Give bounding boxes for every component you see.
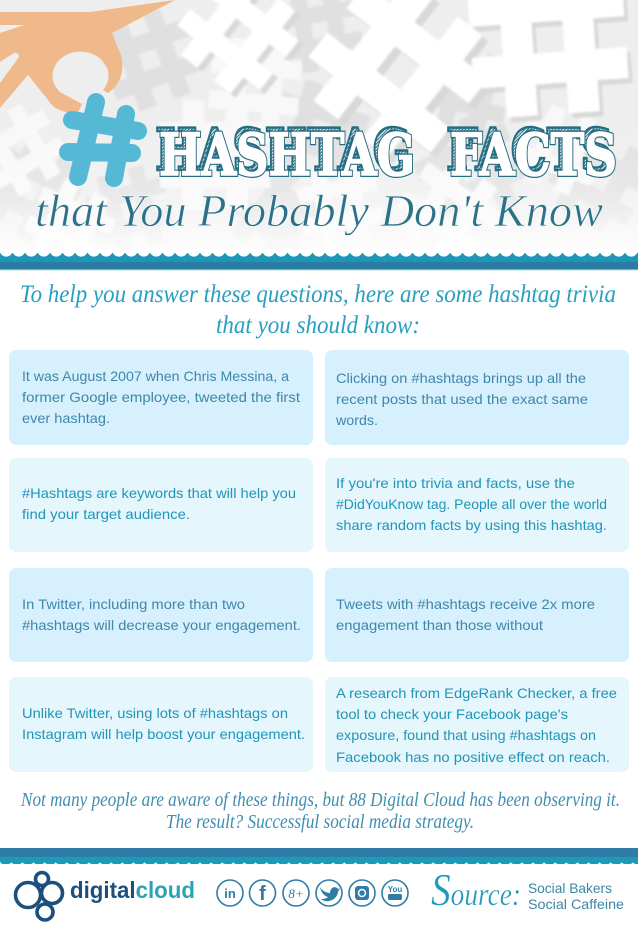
icon: blue hashtag <box>68 102 138 178</box>
card 7 <box>9 677 313 772</box>
closing text <box>20 789 620 833</box>
card 5: In Twitter, including more than two <box>22 596 245 612</box>
card 1: former Google employee, tweeted the first <box>22 389 300 405</box>
subtitle: that You Probably Don't Know <box>35 185 603 236</box>
card 4: If you're into trivia and facts, use the <box>336 475 575 491</box>
card 2: words. <box>335 412 378 428</box>
card 4: #DidYouKnow tag. People all over the world <box>336 496 607 512</box>
source list: Social Caffeine <box>528 896 624 912</box>
title: hashtag facts: HASHTAG <box>159 121 415 189</box>
card 6: engagement than those without <box>336 617 543 633</box>
card 8: A research from EdgeRank Checker, a free <box>336 685 617 701</box>
social icons: 8+ <box>288 886 304 901</box>
card 6 <box>325 568 629 662</box>
card 6: Tweets with #hashtags receive 2x more <box>336 596 595 612</box>
source label: Source: <box>431 864 521 915</box>
card 8: exposure, found that using #hashtags on <box>336 727 596 743</box>
card 3: #Hashtags are keywords that will help you <box>22 485 296 501</box>
card 7: Instagram will help boost your engagement. <box>22 726 305 742</box>
icon: logo rings <box>16 872 62 920</box>
icon: hand holding hashtag <box>0 0 175 113</box>
social icons: You <box>388 885 402 894</box>
card 3: find your target audience. <box>22 506 190 522</box>
bottom wave band <box>0 848 638 861</box>
card 8: tool to check your Facebook page's <box>336 706 568 722</box>
card 3 <box>9 458 313 552</box>
top wave band <box>0 249 638 270</box>
title: hashtag facts <box>155 116 617 189</box>
header background: hashtag pattern <box>0 0 638 240</box>
logo: digitalcloud: digitalcloud <box>70 877 195 903</box>
card 2: recent posts that used the exact same <box>336 391 588 407</box>
card 4 <box>325 458 629 552</box>
social icons: in <box>224 886 236 901</box>
logo: digitalcloud <box>16 872 195 920</box>
card 1: It was August 2007 when Chris Messina, a <box>22 368 289 384</box>
card 1 <box>9 350 313 445</box>
closing text: The result? Successful social media strategy. <box>166 811 474 833</box>
social icons <box>217 880 408 906</box>
source list: Social Bakers <box>528 880 612 896</box>
card 4: share random facts by using this hashtag. <box>336 517 607 533</box>
card 5 <box>9 568 313 662</box>
card 5: #hashtags will decrease your engagement. <box>22 617 301 633</box>
card 8 <box>325 677 629 772</box>
card 2 <box>325 350 629 445</box>
source list <box>528 880 624 912</box>
card 2: Clicking on #hashtags brings up all the <box>336 370 586 386</box>
social icons: f <box>259 883 266 905</box>
card 1: ever hashtag. <box>22 410 110 426</box>
title: hashtag facts: HASHTAG <box>159 121 415 189</box>
intro text: that you should know: <box>216 312 420 339</box>
card 7: Unlike Twitter, using lots of #hashtags on <box>22 705 288 721</box>
intro text <box>20 281 616 339</box>
card 8: Facebook has no positive effect on reach. <box>336 749 610 765</box>
title: hashtag facts: HASHTAG <box>155 116 411 184</box>
